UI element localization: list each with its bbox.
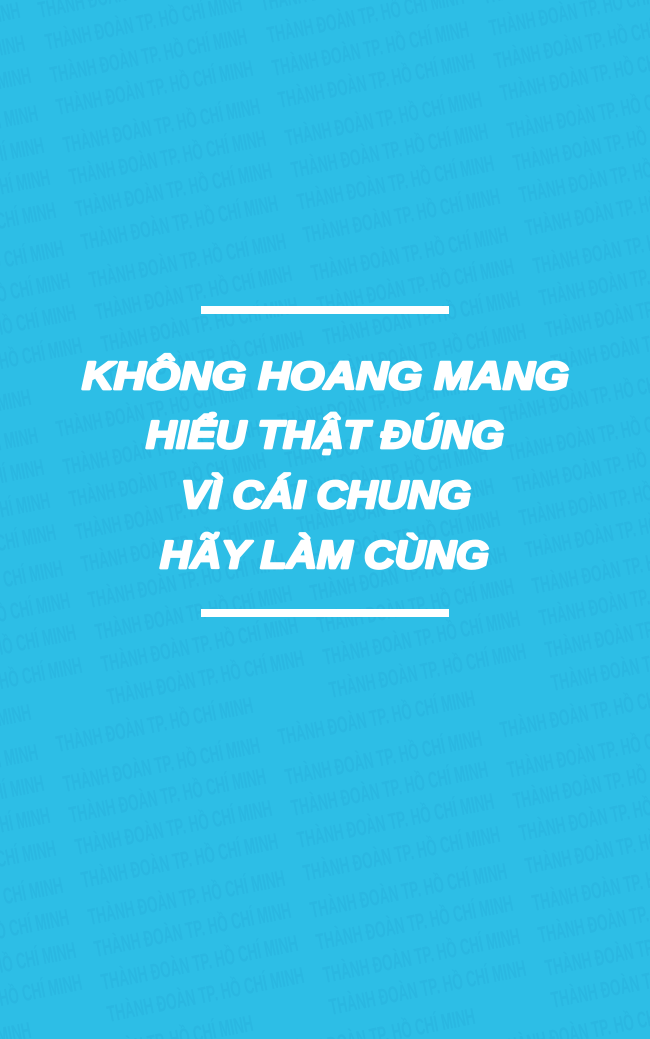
watermark pattern: Thành Đoàn TP. Hồ Chí Minh: THÀNH ĐOÀN TP. HỒ CHÍ MINH xyxy=(289,440,490,505)
watermark pattern: Thành Đoàn TP. Hồ Chí Minh: THÀNH ĐOÀN TP. HỒ CHÍ MINH xyxy=(295,788,496,853)
watermark pattern: Thành Đoàn TP. Hồ Chí Minh: THÀNH ĐOÀN TP. HỒ CHÍ MINH xyxy=(92,897,293,962)
watermark pattern: Thành Đoàn TP. Hồ Chí Minh: THÀNH ĐOÀN TP. HỒ CHÍ MINH xyxy=(105,325,306,390)
watermark pattern: Thành Đoàn TP. Hồ Chí Minh: THÀNH ĐOÀN TP. HỒ CHÍ MINH xyxy=(54,55,255,120)
watermark pattern: Thành Đoàn TP. Hồ Chí Minh: THÀNH ĐOÀN TP. HỒ CHÍ MINH xyxy=(54,692,255,757)
watermark pattern: Thành Đoàn TP. Hồ Chí Minh: THÀNH ĐOÀN TP. HỒ CHÍ MINH xyxy=(54,377,255,442)
watermark pattern: Thành Đoàn TP. Hồ Chí Minh: THÀNH ĐOÀN TP. HỒ CHÍ MINH xyxy=(105,962,306,1027)
watermark pattern: Thành Đoàn TP. Hồ Chí Minh: THÀNH ĐOÀN TP. HỒ CHÍ MINH xyxy=(321,285,522,350)
title line 2: HIỂU THẬT ĐÚNG xyxy=(146,412,504,457)
watermark pattern: Thành Đoàn TP. Hồ Chí Minh: THÀNH ĐOÀN TP. HỒ CHÍ MINH xyxy=(327,638,528,703)
watermark pattern: Thành Đoàn TP. Hồ Chí Minh: THÀNH ĐOÀN TP. HỒ CHÍ MINH xyxy=(308,858,509,923)
watermark pattern: Thành Đoàn TP. Hồ Chí Minh: THÀNH ĐOÀN TP. HỒ CHÍ MINH xyxy=(67,763,268,828)
watermark pattern: Thành Đoàn TP. Hồ Chí Minh: THÀNH ĐOÀN TP. HỒ CHÍ MINH xyxy=(301,505,502,570)
title slogan xyxy=(82,353,569,577)
watermark pattern: Thành Đoàn TP. Hồ Chí Minh: THÀNH ĐOÀN TP. HỒ CHÍ MINH xyxy=(67,125,268,190)
title line 4: HÃY LÀM CÙNG xyxy=(160,533,489,577)
watermark pattern: Thành Đoàn TP. Hồ Chí Minh: THÀNH ĐOÀN TP. HỒ CHÍ MINH xyxy=(99,292,300,357)
watermark pattern: Thành Đoàn TP. Hồ Chí Minh: THÀNH ĐOÀN TP. HỒ CHÍ MINH xyxy=(315,253,516,318)
watermark pattern: Thành Đoàn TP. Hồ Chí Minh: THÀNH ĐOÀN TP. HỒ CHÍ MINH xyxy=(321,605,522,670)
watermark pattern: Thành Đoàn TP. Hồ Chí Minh: THÀNH ĐOÀN TP. HỒ CHÍ MINH xyxy=(327,955,528,1020)
watermark pattern: Thành Đoàn TP. Hồ Chí Minh: THÀNH ĐOÀN TP. HỒ CHÍ MINH xyxy=(93,260,294,325)
watermark pattern: Thành Đoàn TP. Hồ Chí Minh: THÀNH ĐOÀN TP. HỒ CHÍ MINH xyxy=(73,157,274,222)
bottom white bar xyxy=(201,609,449,617)
watermark pattern: Thành Đoàn TP. Hồ Chí Minh: THÀNH ĐOÀN TP. HỒ CHÍ MINH xyxy=(309,221,510,286)
watermark pattern: Thành Đoàn TP. Hồ Chí Minh: THÀNH ĐOÀN TP. HỒ CHÍ MINH xyxy=(295,150,496,215)
watermark pattern: Thành Đoàn TP. Hồ Chí Minh: THÀNH ĐOÀN TP. HỒ CHÍ MINH xyxy=(93,580,294,645)
watermark pattern: Thành Đoàn TP. Hồ Chí Minh: THÀNH ĐOÀN TP. HỒ CHÍ MINH xyxy=(61,415,262,480)
watermark pattern: Thành Đoàn TP. Hồ Chí Minh: THÀNH ĐOÀN TP. HỒ CHÍ MINH xyxy=(289,118,490,183)
watermark pattern: Thành Đoàn TP. Hồ Chí Minh: THÀNH ĐOÀN TP. HỒ CHÍ MINH xyxy=(79,828,280,893)
watermark pattern: Thành Đoàn TP. Hồ Chí Minh: THÀNH ĐOÀN TP. HỒ CHÍ MINH xyxy=(99,930,300,995)
watermark pattern: Thành Đoàn TP. Hồ Chí Minh: THÀNH ĐOÀN TP. HỒ CHÍ MINH xyxy=(314,890,515,955)
top white bar xyxy=(201,306,449,314)
watermark pattern: Thành Đoàn TP. Hồ Chí Minh: THÀNH ĐOÀN TP. HỒ CHÍ MINH xyxy=(295,473,496,538)
watermark pattern: Thành Đoàn TP. Hồ Chí Minh: THÀNH ĐOÀN TP. HỒ CHÍ MINH xyxy=(270,16,471,81)
watermark pattern: Thành Đoàn TP. Hồ Chí Minh: THÀNH ĐOÀN TP. HỒ CHÍ MINH xyxy=(301,821,502,886)
watermark pattern: Thành Đoàn TP. Hồ Chí Minh: THÀNH ĐOÀN TP. HỒ CHÍ MINH xyxy=(327,318,528,383)
watermark pattern: Thành Đoàn TP. Hồ Chí Minh: THÀNH ĐOÀN TP. HỒ CHÍ MINH xyxy=(283,725,484,790)
watermark pattern: Thành Đoàn TP. Hồ Chí Minh: THÀNH ĐOÀN TP. HỒ CHÍ MINH xyxy=(276,48,477,113)
watermark pattern: Thành Đoàn TP. Hồ Chí Minh: THÀNH ĐOÀN TP. HỒ CHÍ MINH xyxy=(301,183,502,248)
watermark pattern: Thành Đoàn TP. Hồ Chí Minh: THÀNH ĐOÀN TP. HỒ CHÍ MINH xyxy=(67,447,268,512)
watermark pattern: Thành Đoàn TP. Hồ Chí Minh: THÀNH ĐOÀN TP. HỒ CHÍ MINH xyxy=(73,795,274,860)
title line 3: VÌ CÁI CHUNG xyxy=(181,473,471,517)
watermark pattern: Thành Đoàn TP. Hồ Chí Minh: THÀNH ĐOÀN TP. HỒ CHÍ MINH xyxy=(73,480,274,545)
watermark pattern: Thành Đoàn TP. Hồ Chí Minh: THÀNH ĐOÀN TP. HỒ CHÍ MINH xyxy=(87,228,288,293)
watermark pattern: Thành Đoàn TP. Hồ Chí Minh: THÀNH ĐOÀN TP. HỒ CHÍ MINH xyxy=(86,865,287,930)
watermark pattern: Thành Đoàn TP. Hồ Chí Minh: THÀNH ĐOÀN TP. HỒ CHÍ MINH xyxy=(321,923,522,988)
watermark pattern: Thành Đoàn TP. Hồ Chí Minh: THÀNH ĐOÀN TP. HỒ CHÍ MINH xyxy=(308,541,509,606)
watermark pattern: Thành Đoàn TP. Hồ Chí Minh: THÀNH ĐOÀN TP. HỒ CHÍ MINH xyxy=(79,190,280,255)
watermark pattern: Thành Đoàn TP. Hồ Chí Minh: THÀNH ĐOÀN TP. HỒ CHÍ MINH xyxy=(99,612,300,677)
watermark pattern: Thành Đoàn TP. Hồ Chí Minh: THÀNH ĐOÀN TP. HỒ CHÍ MINH xyxy=(283,86,484,151)
watermark pattern: Thành Đoàn TP. Hồ Chí Minh: THÀNH ĐOÀN TP. HỒ CHÍ MINH xyxy=(283,408,484,473)
watermark pattern: Thành Đoàn TP. Hồ Chí Minh: THÀNH ĐOÀN TP. HỒ CHÍ MINH xyxy=(79,512,280,577)
watermark pattern: Thành Đoàn TP. Hồ Chí Minh: THÀNH ĐOÀN TP. HỒ CHÍ MINH xyxy=(315,573,516,638)
watermark pattern: Thành Đoàn TP. Hồ Chí Minh: THÀNH ĐOÀN TP. HỒ CHÍ MINH xyxy=(289,756,490,821)
watermark pattern: Thành Đoàn TP. Hồ Chí Minh: THÀNH ĐOÀN TP. HỒ CHÍ MINH xyxy=(61,93,262,158)
watermark pattern: Thành Đoàn TP. Hồ Chí Minh: THÀNH ĐOÀN TP. HỒ CHÍ MINH xyxy=(61,732,262,797)
watermark pattern: Thành Đoàn TP. Hồ Chí Minh: THÀNH ĐOÀN TP. HỒ CHÍ MINH xyxy=(86,548,287,613)
watermark pattern: Thành Đoàn TP. Hồ Chí Minh: THÀNH ĐOÀN TP. HỒ CHÍ MINH xyxy=(276,370,477,435)
watermark pattern: Thành Đoàn TP. Hồ Chí Minh: THÀNH ĐOÀN TP. HỒ CHÍ MINH xyxy=(105,645,306,710)
watermark pattern: Thành Đoàn TP. Hồ Chí Minh: THÀNH ĐOÀN TP. HỒ CHÍ MINH xyxy=(48,23,249,88)
watermark pattern: Thành Đoàn TP. Hồ Chí Minh: THÀNH ĐOÀN TP. HỒ CHÍ MINH xyxy=(276,685,477,750)
title line 1: KHÔNG HOANG MANG xyxy=(82,353,569,398)
